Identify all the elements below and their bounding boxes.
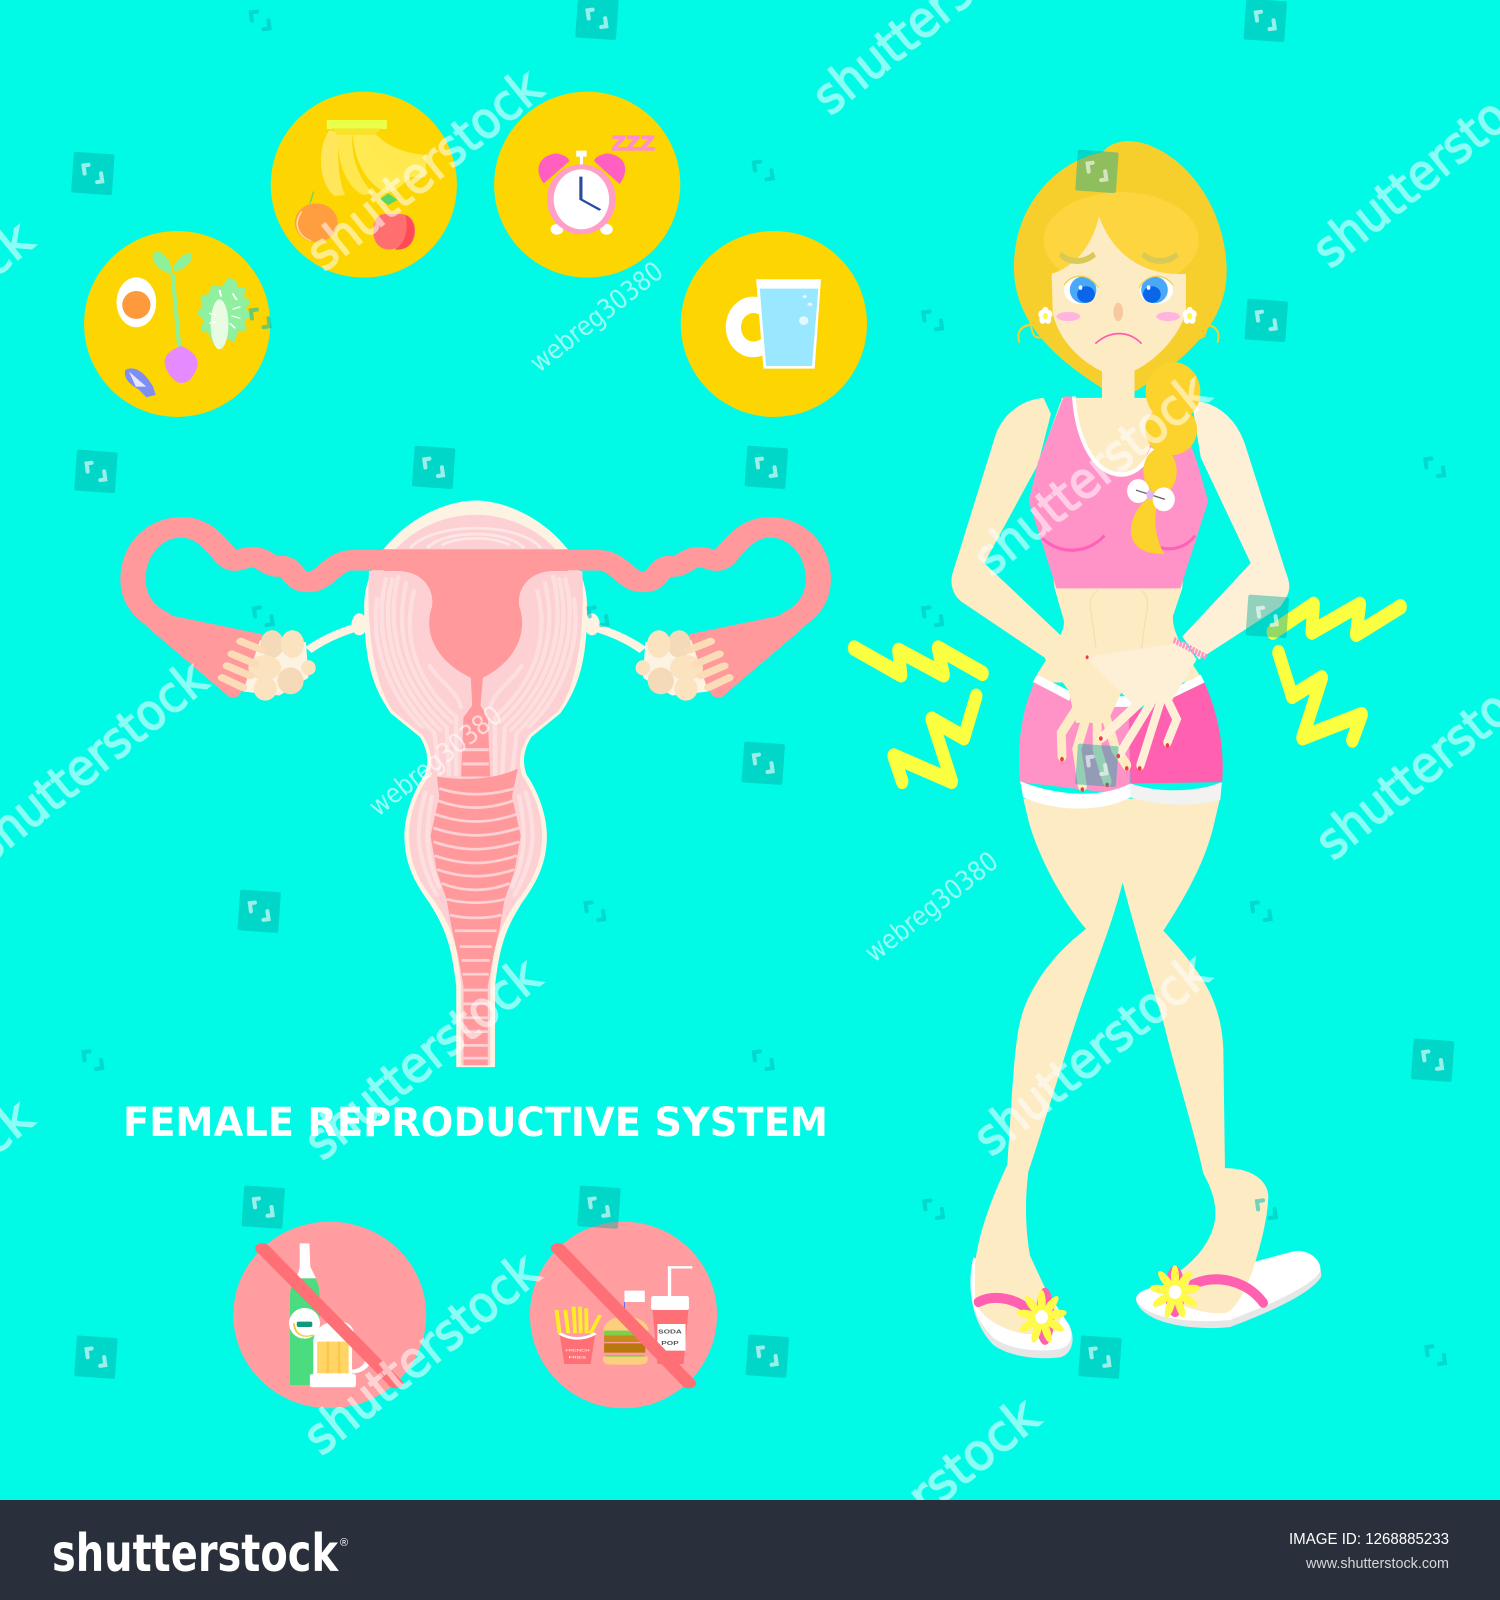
vaginal canal [431,769,521,1065]
site url: www.shutterstock.com [1305,1555,1449,1572]
dome stripes [410,528,541,548]
muscle wall [396,515,556,549]
water icon circle: glass with handle [681,231,867,417]
abdomen lines [1090,591,1148,648]
no fast food circle: SODA [658,1329,682,1335]
slipper flowers [1036,1288,1054,1345]
no fast food circle: FRIES [569,1355,587,1360]
watermark: shutterstock text: shutterstock [292,1242,550,1466]
right hand [1088,643,1195,765]
watermark: shutterstock text: shutterstock [962,943,1220,1167]
cheeks, nose, mouth [1056,312,1080,321]
image id: IMAGE ID: 1268885233 [1289,1531,1449,1548]
no fast food circle [530,1222,717,1408]
hair [1014,141,1227,391]
left arm [951,398,1062,662]
neck [1102,368,1135,402]
right arm [1182,400,1289,660]
sleep icon circle: alarm clock: ZZZ [612,132,655,155]
fruit icon circle: bananas, orange, apple [271,92,457,278]
no fast food circle: POP [661,1341,679,1347]
earrings [1018,292,1047,343]
woman figure: torso, head and arms [854,141,1401,809]
pink crop top [1029,396,1208,588]
footer bar [0,1500,1500,1600]
pain lightning bolts [854,604,1401,781]
watermark: shutterstock text: terstock [858,1386,1050,1557]
uterus anatomy diagram [133,501,818,1067]
eyebrows [1060,254,1177,261]
torso [1032,398,1204,683]
watermark: shutterstock text: shutterstock [962,363,1220,587]
face [1052,216,1186,377]
watermark: contributor name: webreg30380 [859,846,1004,969]
right slipper [1136,1252,1321,1328]
bracelet [1174,640,1206,657]
watermark: shutterstock text: shutterstock [295,58,553,282]
braid [1131,362,1200,554]
hair bow [1127,479,1149,503]
legs [975,799,1268,1334]
shorts [1019,683,1132,795]
watermark: logo marks [71,0,1454,1379]
watermark: shutterstock text: shutterstock [293,947,551,1171]
no alcohol circle [233,1222,426,1408]
sleep icon circle: alarm clock [494,92,680,278]
woman figure: legs and slippers [970,799,1321,1358]
eyes [1064,276,1097,304]
fallopian tubes and ovaries [133,527,391,701]
food icon circle: egg, radish, greens, fish [84,231,270,417]
no fast food circle: FRENCH [565,1348,590,1353]
left hand [1047,660,1132,786]
slipper straps [978,1298,1035,1316]
left slipper [970,1257,1073,1358]
watermark: contributor name: webreg30380 [524,256,669,379]
watermark: contributor name [363,256,1004,969]
outer wall [364,501,587,1067]
registered mark: ® [340,1537,348,1549]
watermark: contributor name: webreg30380 [363,700,508,823]
fingernails [1060,655,1169,792]
uterine cavity [384,549,568,777]
footer logo: shutterstock [52,1524,339,1584]
title: FEMALE REPRODUCTIVE SYSTEM [123,1100,828,1146]
